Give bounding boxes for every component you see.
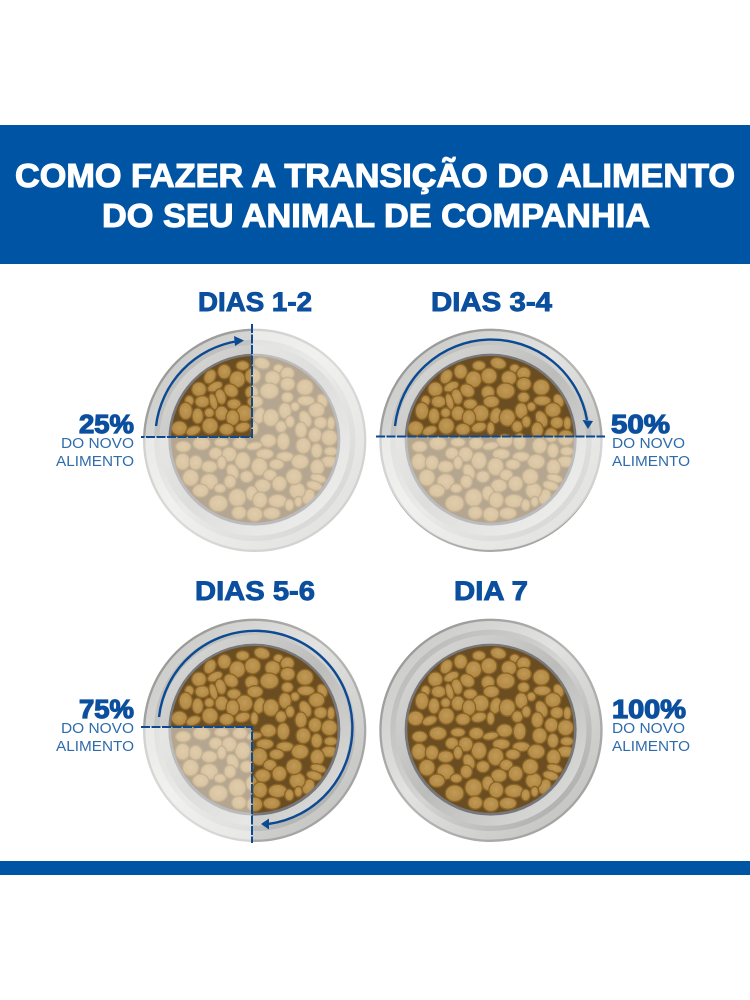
- panel: dias 1-2: [56, 287, 368, 554]
- title: [15, 157, 735, 234]
- arrow: 75 percent arc: [159, 631, 352, 830]
- bowl 50 percent: [378, 329, 604, 552]
- heading: dia 7: DIA 7: [454, 576, 528, 606]
- label: 50%: 50%: [611, 409, 670, 439]
- footer band: [0, 861, 750, 875]
- heading: dias 5-6: DIAS 5-6: [195, 576, 315, 606]
- label: 25%: DO NOVO: [61, 435, 134, 452]
- label: 50%: ALIMENTO: [612, 453, 690, 470]
- panel: dias 5-6: [56, 576, 366, 843]
- arrow: 50 percent arc: [395, 340, 593, 429]
- bowl 25 percent: [142, 328, 368, 554]
- label: 75%: ALIMENTO: [56, 738, 134, 755]
- label: 100%: DO NOVO: [612, 720, 685, 737]
- panel: dia 7: [379, 576, 690, 842]
- label: 75%: [56, 694, 134, 755]
- label: 75%: 75%: [79, 694, 134, 724]
- bowl 75 percent: [142, 619, 366, 843]
- label: 100%: ALIMENTO: [612, 738, 690, 755]
- label: 50%: DO NOVO: [612, 435, 685, 452]
- label: 25%: ALIMENTO: [56, 453, 134, 470]
- heading: dias 1-2: DIAS 1-2: [198, 287, 312, 317]
- arrow: 25 percent arc: [156, 336, 244, 426]
- title: DO SEU ANIMAL DE COMPANHIA: [102, 197, 650, 234]
- label: 75%: DO NOVO: [61, 720, 134, 737]
- label: 100%: [612, 694, 690, 755]
- label: 100%: 100%: [612, 694, 686, 724]
- label: 50%: [611, 409, 690, 470]
- dashed divider 25 percent: [141, 324, 252, 437]
- dashed divider 75 percent: [141, 727, 252, 843]
- panel: dias 3-4: [376, 287, 690, 552]
- heading: dias 3-4: DIAS 3-4: [431, 287, 552, 317]
- label: 25%: 25%: [79, 409, 134, 439]
- title: COMO FAZER A TRANSIÇÃO DO ALIMENTO: [15, 157, 735, 194]
- bowl 100 percent: [379, 619, 603, 842]
- header banner: [0, 125, 750, 264]
- dashed divider 50 percent: [376, 436, 605, 438]
- label: 25%: [56, 409, 134, 470]
